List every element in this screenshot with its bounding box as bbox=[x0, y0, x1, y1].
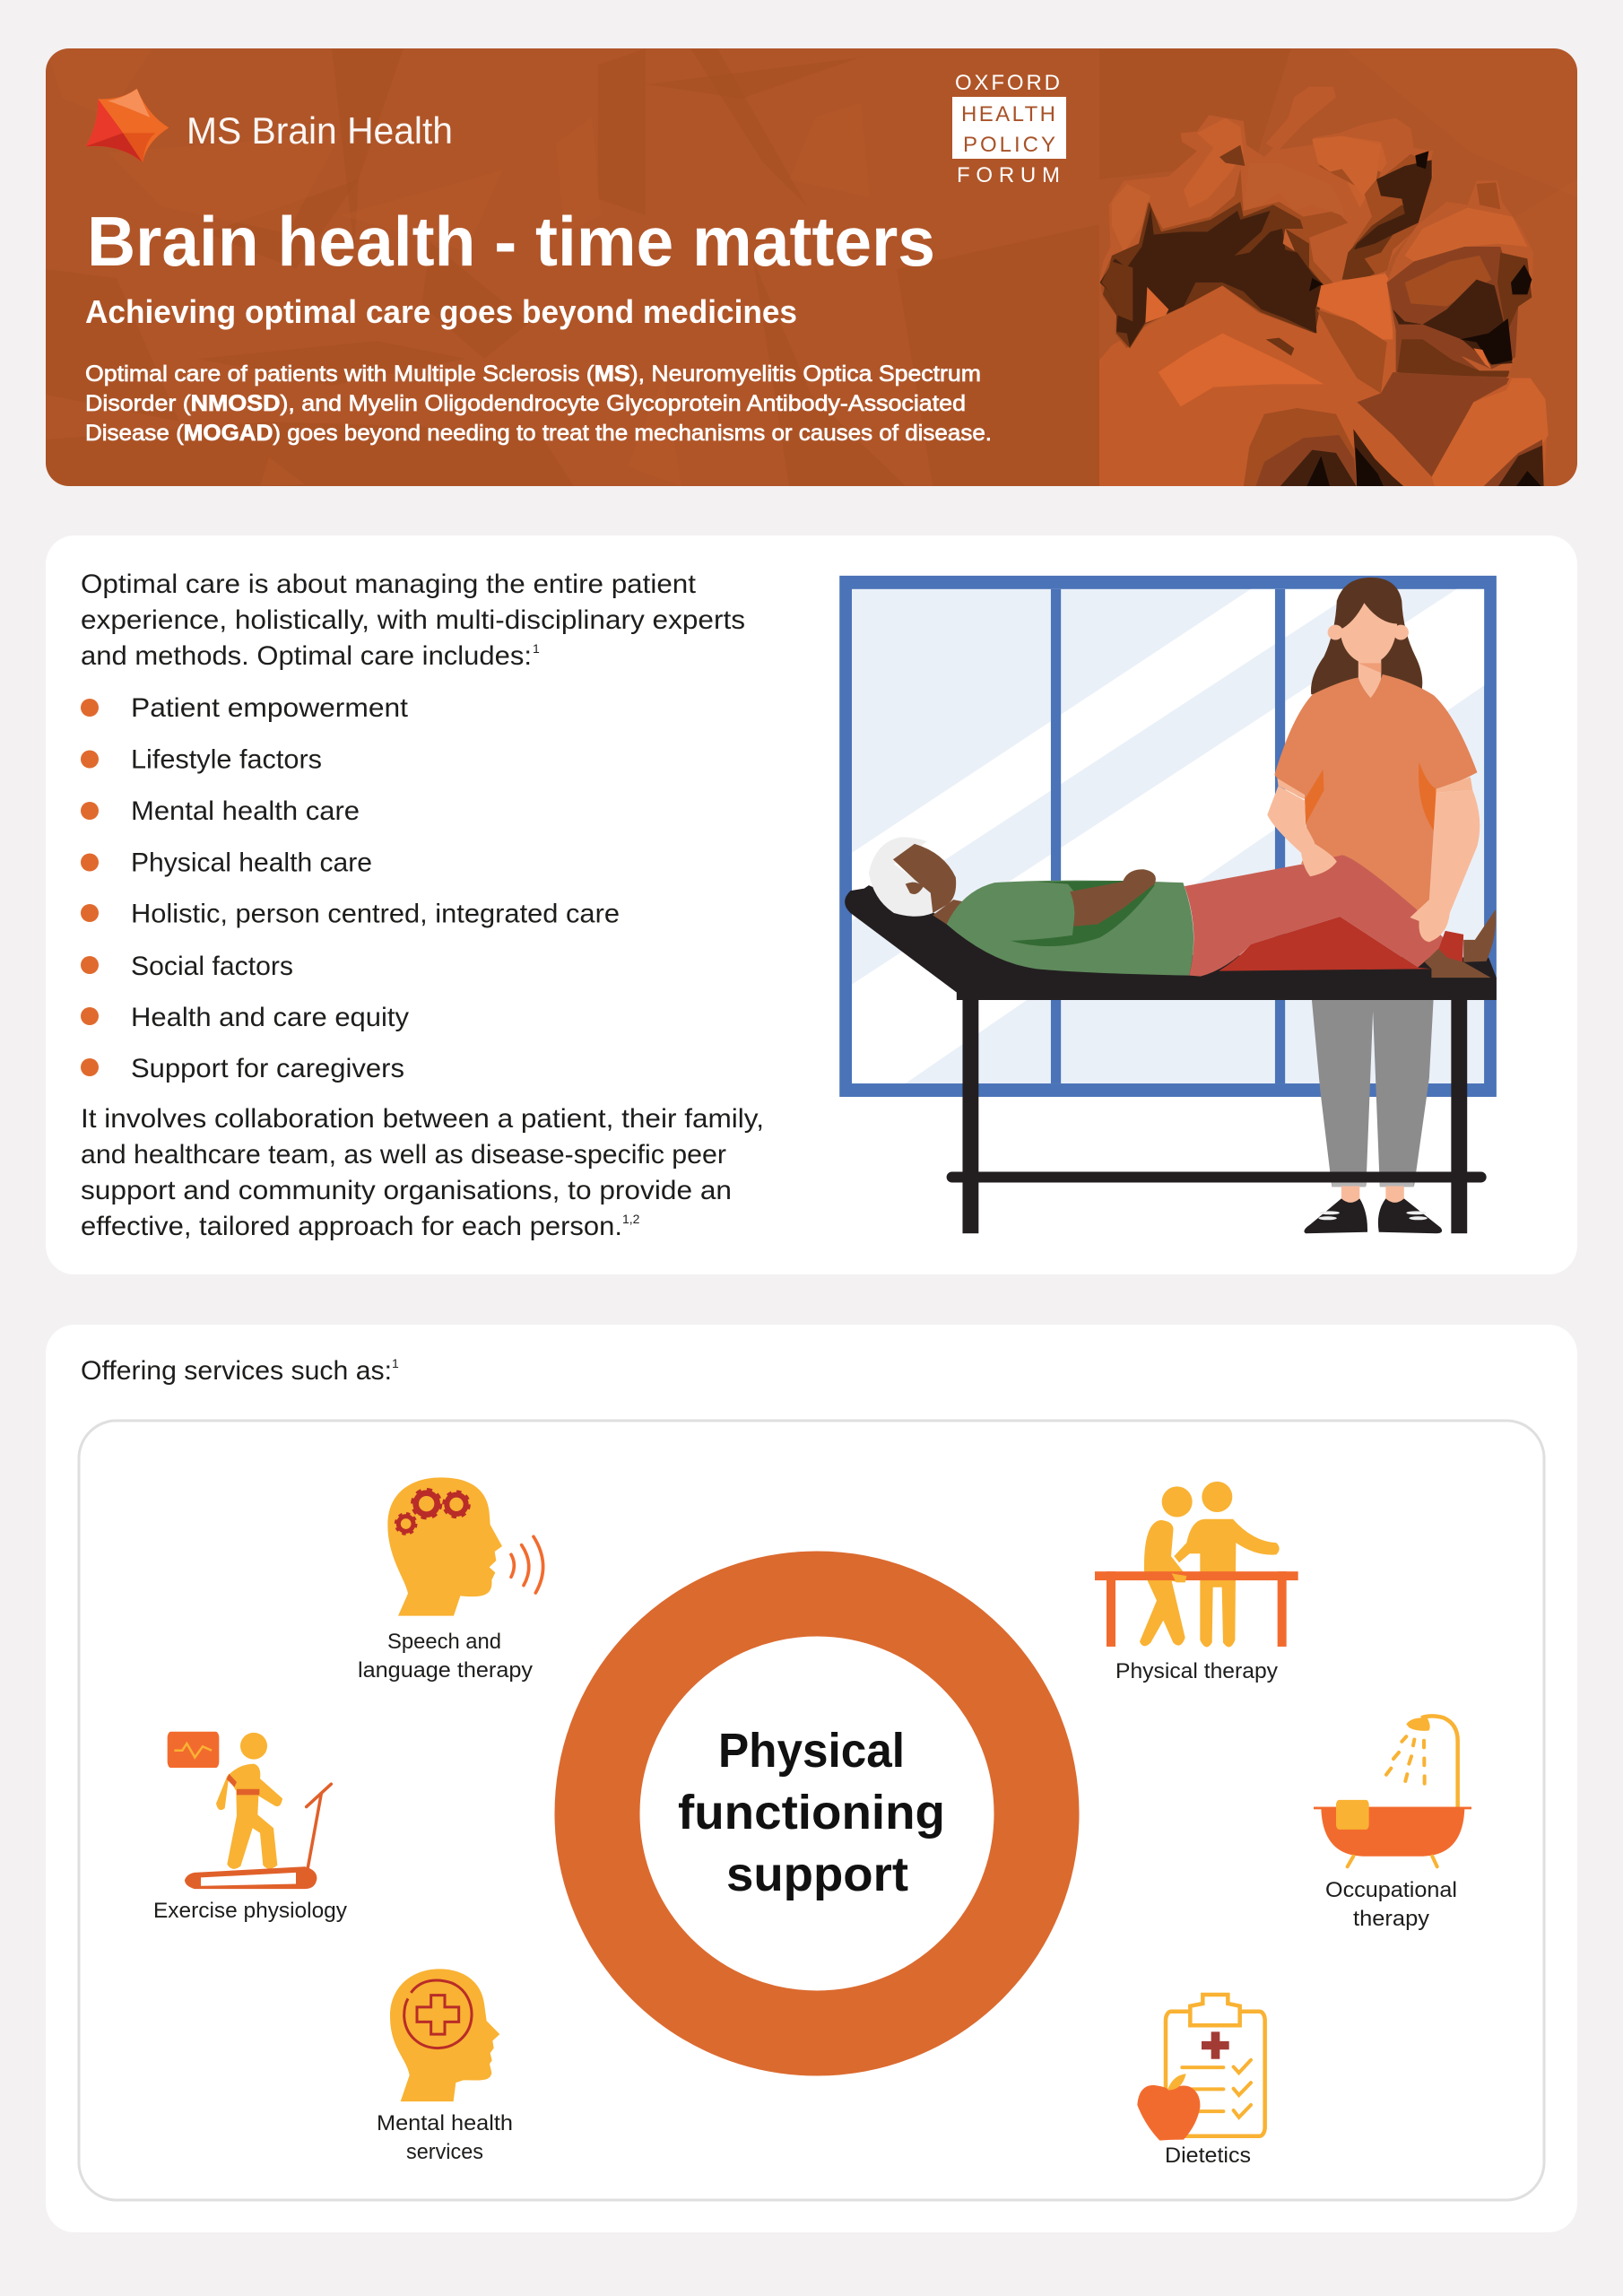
bullet list bbox=[81, 693, 620, 1083]
table bbox=[845, 885, 1497, 1233]
label: Mental health bbox=[377, 2111, 513, 2135]
text block: introduction: and methods. Optimal care includes: bbox=[81, 641, 532, 671]
bullet list: Lifestyle factors bbox=[131, 744, 322, 775]
service: exercise physiology bbox=[153, 1732, 347, 1923]
label: Physical therapy bbox=[1115, 1659, 1278, 1683]
label: Dietetics bbox=[1165, 2144, 1251, 2168]
subtitle: Achieving optimal care goes beyond medicines bbox=[85, 293, 797, 330]
text block: introduction bbox=[81, 570, 745, 671]
intro paragraph: Optimal care of patients with Multiple Sclerosis ( MS), Neuromyelitis Optica Spectrum bbox=[85, 361, 981, 387]
logo text: MS Brain Health bbox=[187, 109, 453, 152]
icon: bath and shower bbox=[1314, 1716, 1471, 1866]
icon: head with gears and sound waves bbox=[387, 1477, 543, 1616]
text block: collaboration: support and community organisations, to provide an bbox=[81, 1176, 732, 1205]
label: Occupational bbox=[1325, 1878, 1457, 1902]
illustration: sculpture of two figures bbox=[1099, 87, 1549, 487]
bullet list: Support for caregivers bbox=[131, 1054, 404, 1083]
bullet list: Social factors bbox=[131, 952, 293, 981]
label: services bbox=[406, 2140, 483, 2164]
section lead-in: 1 bbox=[392, 1356, 399, 1370]
label bbox=[377, 2111, 513, 2164]
label: Speech and bbox=[387, 1630, 501, 1654]
logo: MS Brain Health star bbox=[85, 89, 169, 162]
label bbox=[358, 1630, 533, 1683]
panel: services bbox=[46, 1325, 1577, 2232]
text block: collaboration: 1,2 bbox=[622, 1212, 640, 1226]
bullet list: Physical health care bbox=[131, 848, 372, 877]
panel: header banner bbox=[46, 48, 1577, 487]
section lead-in: Offering services such as: bbox=[81, 1356, 392, 1386]
label bbox=[1325, 1878, 1457, 1931]
bullet list: Patient empowerment bbox=[131, 693, 409, 723]
therapist hands and arms bbox=[1267, 786, 1480, 942]
bullet list: Health and care equity bbox=[131, 1003, 409, 1032]
intro paragraph: Disease (MOGAD) goes beyond needing to treat the mechanisms or causes of disease. bbox=[85, 421, 992, 446]
icon: therapist and patient at parallel bars bbox=[1095, 1482, 1298, 1647]
service: speech and language therapy bbox=[358, 1477, 543, 1683]
service: occupational therapy bbox=[1314, 1716, 1471, 1931]
text block: introduction: experience, holistically, with multi-disciplinary experts bbox=[81, 605, 745, 635]
logo: Oxford Health Policy Forum bbox=[952, 71, 1066, 187]
illustration: therapist treating a patient on a table bbox=[839, 576, 1497, 1233]
label: Exercise physiology bbox=[153, 1899, 347, 1923]
intro paragraph: Disorder ( NMOSD ), and Myelin Oligodendrocyte Glycoprotein Antibody-Associated bbox=[85, 391, 966, 416]
ring text: Physical bbox=[718, 1724, 905, 1778]
text block: collaboration: and healthcare team, as well as disease-specific peer bbox=[81, 1140, 726, 1170]
window bbox=[839, 576, 1497, 1097]
ring text: functioning bbox=[678, 1786, 945, 1839]
therapist bbox=[1274, 578, 1477, 1233]
bullet list: Mental health care bbox=[131, 796, 360, 826]
icon: person on treadmill bbox=[168, 1732, 331, 1889]
icon: head with medical cross bbox=[390, 1969, 499, 2101]
logo: Oxford Health Policy Forum: HEALTH bbox=[961, 102, 1055, 126]
text block: collaboration: It involves collaboration between a patient, their family, bbox=[81, 1104, 764, 1134]
text block: introduction: Optimal care is about managing the entire patient bbox=[81, 570, 697, 599]
service: mental health services bbox=[377, 1969, 513, 2164]
intro paragraph bbox=[85, 361, 992, 446]
patient bbox=[869, 837, 1496, 978]
label: language therapy bbox=[358, 1658, 533, 1683]
text block: collaboration bbox=[81, 1104, 764, 1241]
service: dietetics bbox=[1137, 1995, 1265, 2168]
label: therapy bbox=[1353, 1907, 1429, 1931]
panel: optimal care bbox=[46, 535, 1577, 1274]
services frame bbox=[79, 1421, 1544, 2200]
text block: collaboration: effective, tailored approach for each person. bbox=[81, 1212, 622, 1241]
title: Brain health - time matters bbox=[87, 202, 935, 281]
logo: Oxford Health Policy Forum: FORUM bbox=[957, 163, 1060, 187]
icon: clipboard and apple bbox=[1137, 1995, 1265, 2141]
bullet list: Holistic, person centred, integrated care bbox=[131, 899, 620, 929]
logo: Oxford Health Policy Forum: POLICY bbox=[963, 133, 1055, 157]
text block: introduction: 1 bbox=[533, 641, 540, 656]
logo: Oxford Health Policy Forum: OXFORD bbox=[955, 71, 1060, 95]
ring text: support bbox=[726, 1848, 908, 1901]
ring text bbox=[678, 1724, 945, 1901]
service: physical therapy bbox=[1095, 1482, 1298, 1683]
diagram: central ring bbox=[597, 1594, 1037, 2033]
